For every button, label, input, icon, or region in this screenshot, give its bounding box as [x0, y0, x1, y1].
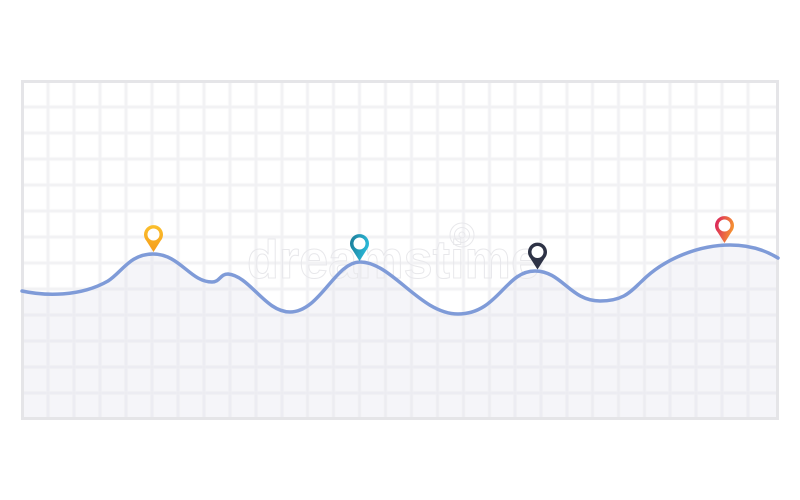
pin: dark navy — [528, 243, 547, 270]
pin: yellow — [144, 225, 163, 252]
line curve — [22, 245, 778, 314]
pin: red-orange — [715, 216, 734, 243]
watermark: dreamstime — [247, 230, 540, 290]
chart background — [22, 81, 778, 419]
infographic: line chart with location pins — [20, 80, 780, 420]
chart frame — [22, 82, 778, 418]
pin: teal — [350, 234, 369, 261]
area fill under the curve — [22, 245, 778, 419]
grid — [22, 81, 778, 419]
